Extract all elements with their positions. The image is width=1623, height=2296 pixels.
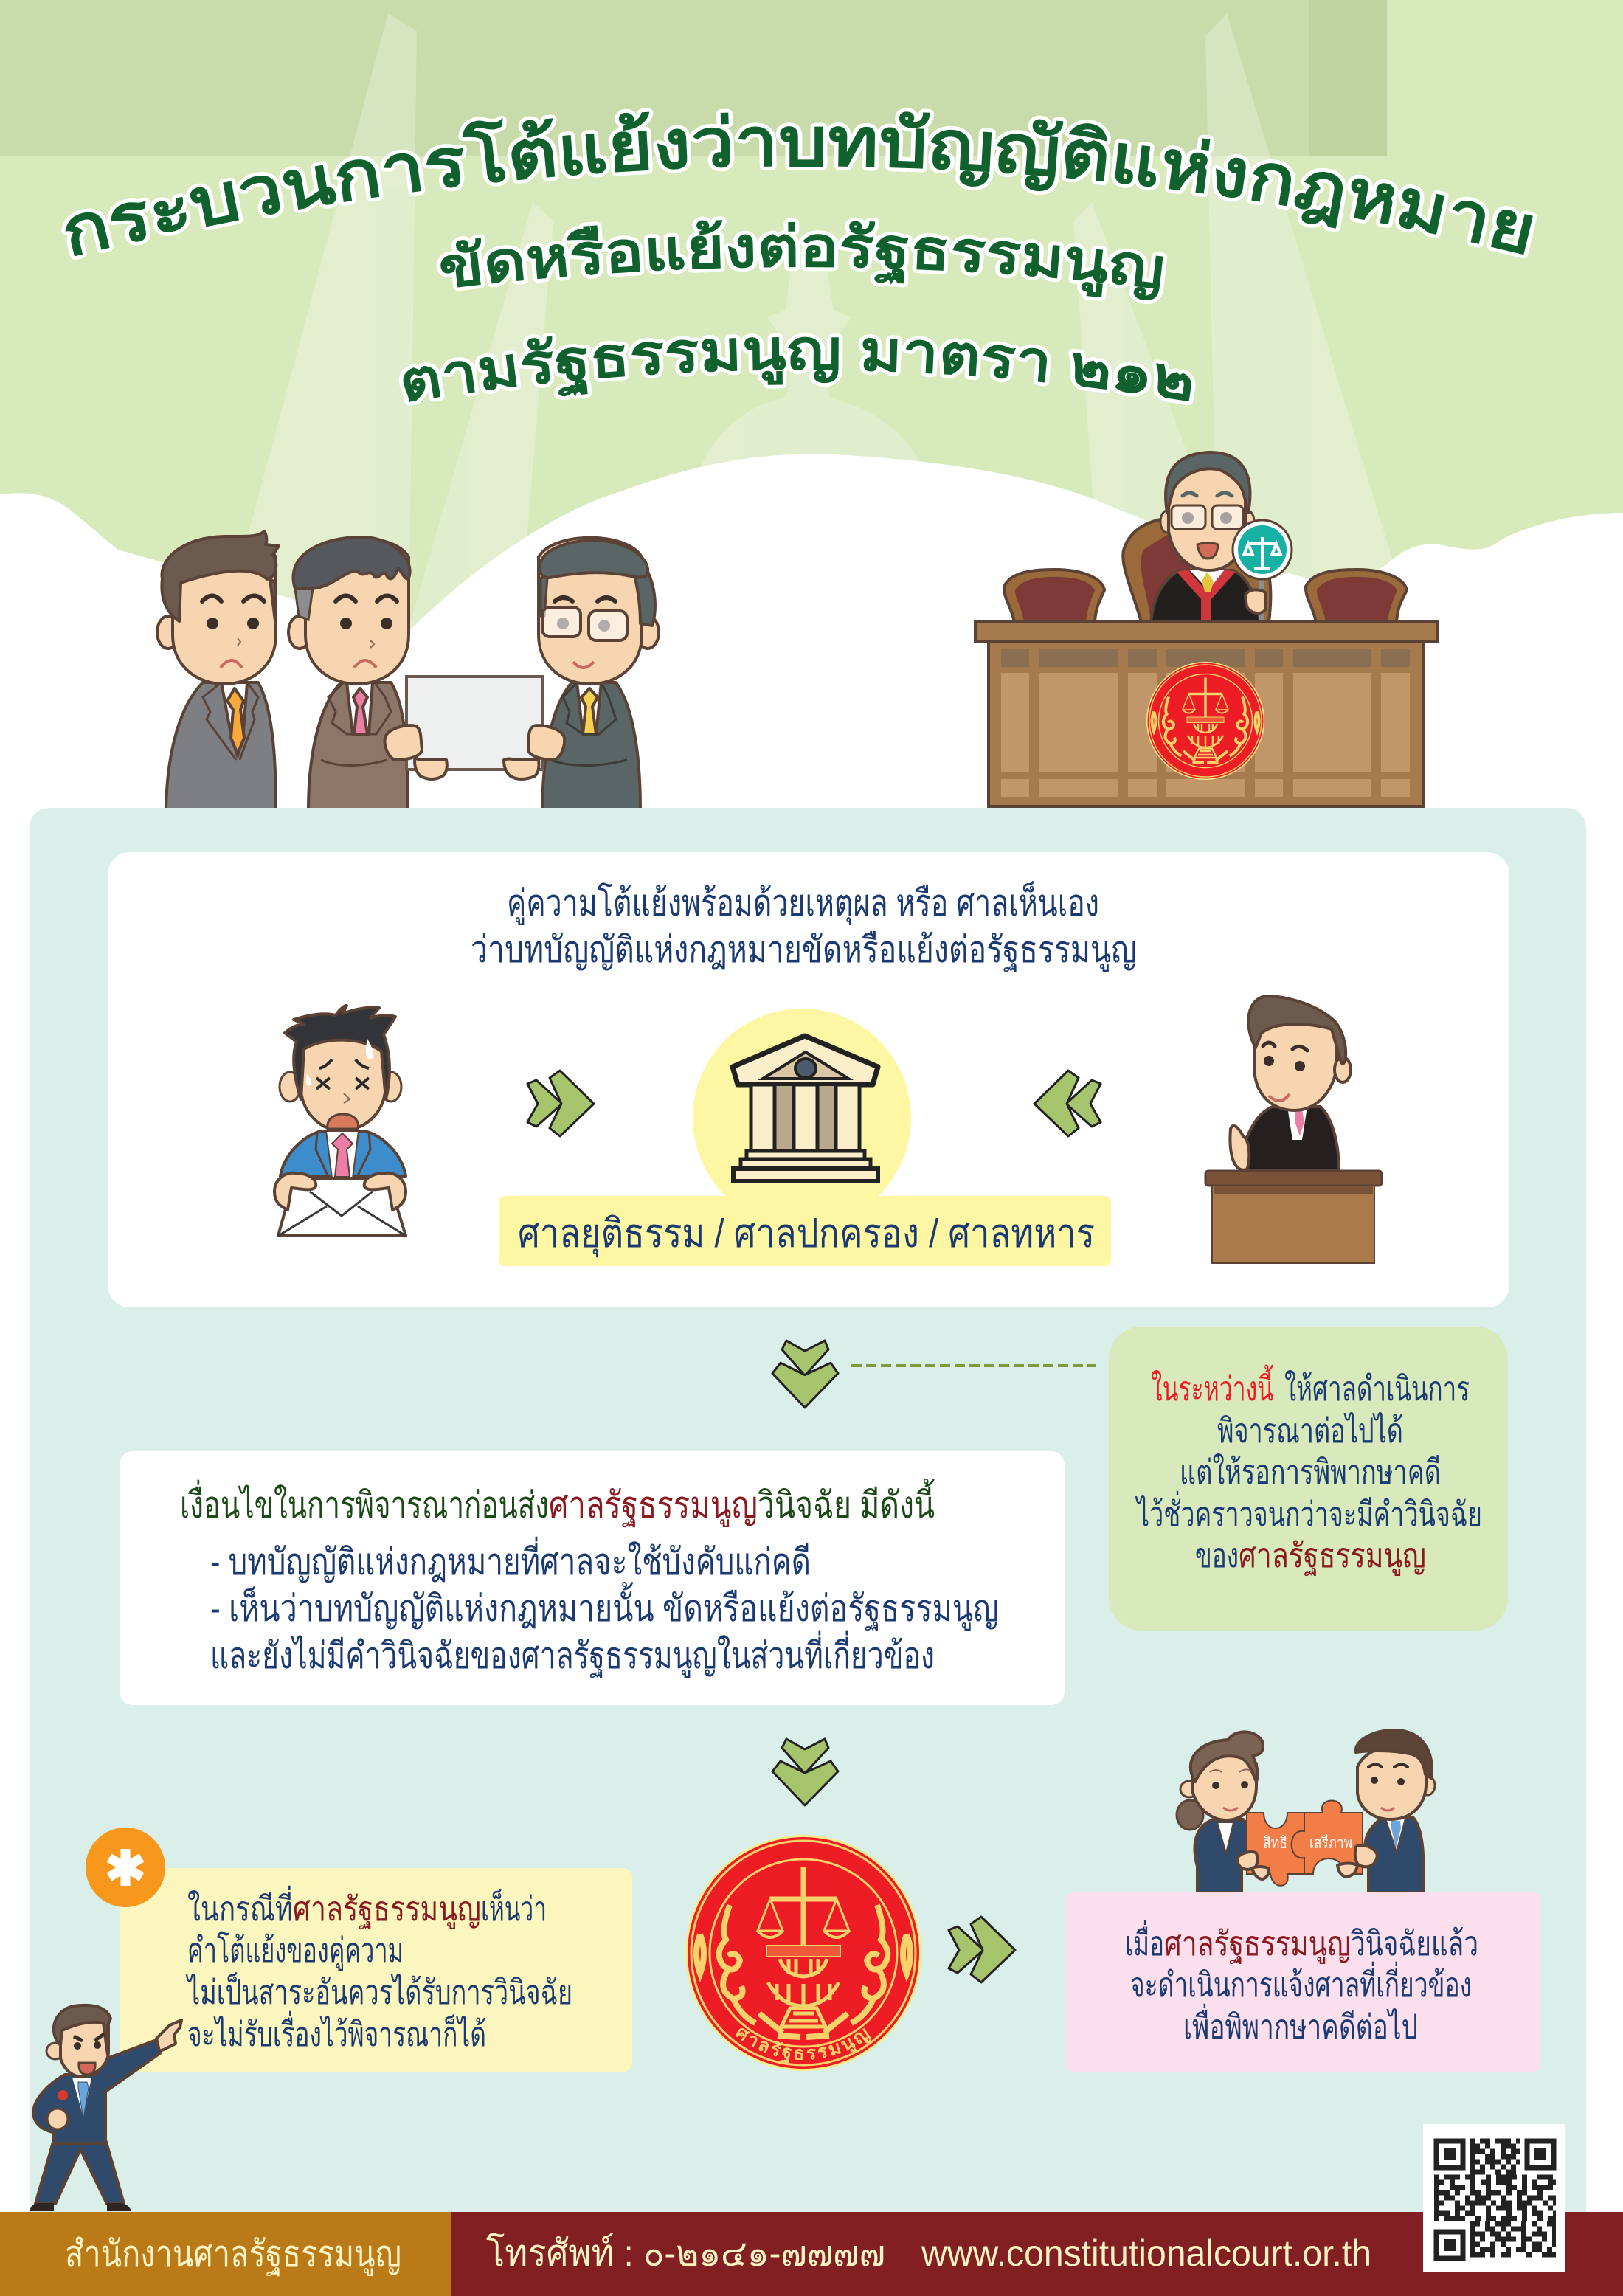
man two xyxy=(288,537,410,810)
arrow: down chevrons one xyxy=(772,1341,838,1408)
panel: interim note: แต่ให้รอการพิพากษาคดี xyxy=(1180,1453,1441,1491)
panel: conditions xyxy=(120,1451,1065,1705)
icon: court building xyxy=(693,1009,911,1227)
puzzle xyxy=(1247,1813,1304,1886)
arrow: right chevrons to outcome xyxy=(949,1917,1015,1982)
QR code xyxy=(1423,2124,1565,2272)
desk xyxy=(975,622,1437,642)
panel: rejection note xyxy=(120,1868,632,2072)
panel: conditions: - บทบัญญัติแห่งกฎหมายที่ศาลจะใช้บังคับแก่คดี xyxy=(210,1537,811,1583)
panel: conditions: และยังไม่มีคำวินิจฉัยของศาลรัฐธรรมนูญในส่วนที่เกี่ยวข้อง xyxy=(210,1631,935,1678)
illustration: man and woman with puzzle xyxy=(1177,1730,1435,1892)
panel: rejection note: ไม่เป็นสาระอันควรได้รับการวินิจฉัย xyxy=(185,1972,572,2011)
man xyxy=(1356,1730,1435,1892)
paddle xyxy=(1259,579,1264,622)
title: ตามรัฐธรรมนูญ มาตรา ๒๑๒ xyxy=(398,332,1195,406)
icon: lawyer at podium xyxy=(1205,996,1382,1263)
seal: constitutional court: ศาลรัฐธรรมนูญ xyxy=(735,2027,871,2063)
side chairs xyxy=(1004,570,1407,622)
document xyxy=(406,677,543,770)
panel: rejection note: คำโต้แย้งของคู่ความ xyxy=(187,1931,404,1971)
panel: outcome: เมื่อ xyxy=(1125,1920,1164,1963)
panel: outcome: วินิจฉัยแล้ว xyxy=(1351,1924,1478,1963)
background: monument silhouette xyxy=(0,0,1402,664)
desk seal xyxy=(1146,662,1264,780)
panel: interim note: ไว้ชั่วคราวจนกว่าจะมีคำวินิจฉัย xyxy=(1135,1490,1482,1533)
panel: rejection note: ศาลรัฐธรรมนูญ xyxy=(293,1889,481,1929)
dashed connector xyxy=(851,1364,1096,1367)
label: court types xyxy=(499,1196,1111,1266)
panel: rejection note: เห็นว่า xyxy=(481,1889,547,1928)
background: light green sky xyxy=(0,0,1623,812)
arrow: left chevrons xyxy=(1034,1071,1101,1136)
footer bar: โทรศัพท์ : ๐-๒๑๔๑-๗๗๗๗ xyxy=(486,2233,885,2274)
panel: interim note: ศาลรัฐธรรมนูญ xyxy=(1239,1536,1426,1576)
woman xyxy=(1177,1732,1263,1892)
icon: worried man with envelope xyxy=(274,1006,406,1236)
panel: conditions: วินิจฉัย มีดังนี้ xyxy=(758,1479,935,1526)
arrow: down chevrons two xyxy=(772,1739,838,1805)
background: white hills xyxy=(0,454,1623,812)
panel: main teal background xyxy=(30,808,1586,2213)
judge xyxy=(1151,452,1292,622)
panel: outcome: เพื่อพิพากษาคดีต่อไป xyxy=(1183,2003,1418,2046)
illustration: three men holding document xyxy=(157,531,659,810)
hands xyxy=(1237,1845,1377,1879)
panel: conditions: เงื่อนไขในการพิจารณาก่อนส่ง xyxy=(180,1480,549,1526)
panel: interim note: พิจารณาต่อไปได้ xyxy=(1217,1411,1403,1450)
footer bar xyxy=(0,2212,1623,2296)
footer bar: www.constitutionalcourt.or.th xyxy=(921,2233,1371,2274)
man one xyxy=(157,531,279,810)
panel heading text xyxy=(471,881,1137,972)
panel: interim note: ในระหว่างนี้ xyxy=(1151,1364,1273,1408)
panel: outcome xyxy=(1066,1892,1540,2072)
illustration: man and woman with puzzle: เสรีภาพ xyxy=(1309,1833,1352,1852)
panel: conditions: ศาลรัฐธรรมนูญ xyxy=(549,1484,758,1527)
panel: rejection note: จะไม่รับเรื่องไว้พิจารณาก็ได้ xyxy=(187,2010,486,2053)
seal: constitutional court xyxy=(685,1835,921,2071)
panel: interim note xyxy=(1109,1327,1508,1631)
title: กระบวนการโต้แย้งว่าบทบัญญัติแห่งกฎหมาย xyxy=(61,108,1537,260)
panel: court filing xyxy=(108,852,1509,1307)
hands xyxy=(385,725,564,779)
illustration: man and woman with puzzle: สิทธิ xyxy=(1263,1833,1287,1852)
icon: orange asterisk badge xyxy=(86,1828,165,1907)
panel: interim note: ของ xyxy=(1195,1536,1239,1574)
footer bar: สำนักงานศาลรัฐธรรมนูญ xyxy=(65,2233,401,2276)
panel: rejection note: ในกรณีที่ xyxy=(187,1885,293,1928)
panel: interim note: ให้ศาลดำเนินการ xyxy=(1284,1369,1470,1408)
panel: outcome: ศาลรัฐธรรมนูญ xyxy=(1164,1924,1351,1964)
panel heading text: คู่ความโต้แย้งพร้อมด้วยเหตุผล หรือ ศาลเห็นเอง xyxy=(507,881,1099,925)
arrow: right chevrons xyxy=(527,1071,594,1136)
panel heading text: ว่าบทบัญญัติแห่งกฎหมายขัดหรือแย้งต่อรัฐธรรมนูญ xyxy=(471,929,1137,972)
illustration: judge at bench xyxy=(975,452,1437,806)
panel: outcome: จะดำเนินการแจ้งศาลที่เกี่ยวข้อง xyxy=(1130,1961,1472,2004)
title xyxy=(61,108,1537,406)
man three xyxy=(539,538,659,810)
centre chair xyxy=(1123,518,1270,622)
label: court types: ศาลยุติธรรม / ศาลปกครอง / ศาลทหาร xyxy=(518,1211,1095,1258)
illustration: pointing man xyxy=(30,2005,181,2211)
title: ขัดหรือแย้งต่อรัฐธรรมนูญ xyxy=(437,216,1167,304)
panel: conditions: - เห็นว่าบทบัญญัติแห่งกฎหมายนั้น ขัดหรือแย้งต่อรัฐธรรมนูญ xyxy=(210,1582,999,1631)
